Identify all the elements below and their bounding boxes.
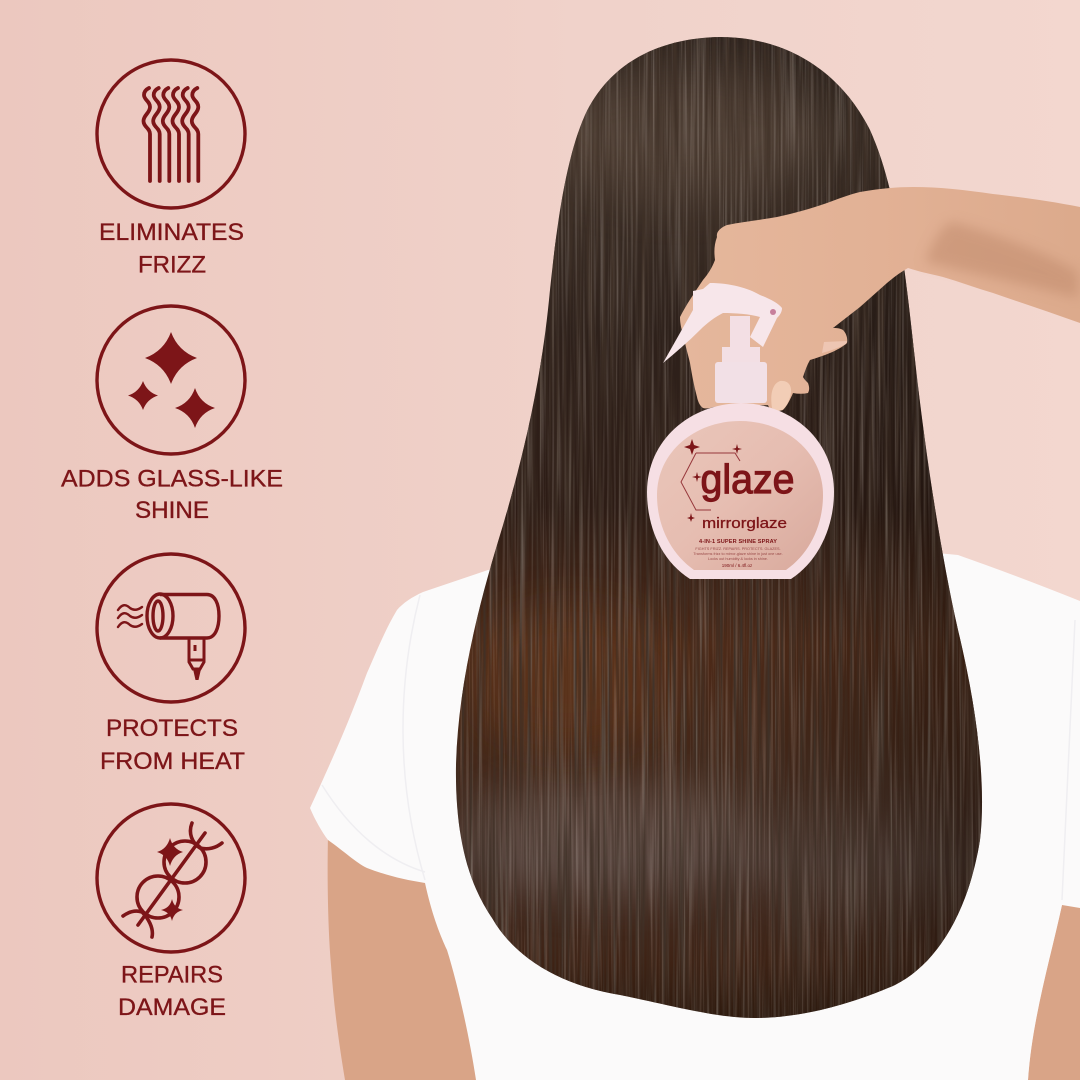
icon: repaired hair strand [97,804,245,952]
label: protects from heat [100,715,245,775]
ring fingernail [822,341,847,353]
label sparkles [684,439,742,522]
label: protects from heat: PROTECTS [106,715,238,742]
volume: 190ml / 6.4fl.oz [722,563,753,568]
trigger pivot dot [770,309,776,315]
wrist shadow [925,222,1078,298]
thumbnail [771,381,791,411]
benefit: adds glass-like shine [61,306,283,524]
icon: frizz strands [97,60,245,208]
label: adds glass-like shine [61,466,283,524]
spray trigger [663,283,782,363]
icon: hair dryer [97,554,245,702]
long brown hair [440,30,1000,1025]
left arm [328,835,520,1080]
mirrorglaze wordmark: mirrorglaze [702,516,787,532]
right arm [1028,895,1080,1080]
label: protects from heat: FROM HEAT [100,748,245,775]
label: adds glass-like shine: ADDS GLASS-LIKE [61,466,283,492]
label: repairs damage: REPAIRS [121,962,223,988]
bottle label [657,421,823,570]
small print line 3: Locks out humidity & locks in shine. [708,557,768,561]
label: repairs damage [118,962,226,1021]
label: repairs damage: DAMAGE [118,994,226,1021]
benefit: protects from heat [97,554,245,775]
label: eliminates frizz: FRIZZ [138,252,206,278]
sleeve fold shadows [322,595,1075,900]
product descriptor: 4-IN-1 SUPER SHINE SPRAY [699,539,777,545]
label: adds glass-like shine: SHINE [135,497,209,524]
benefit: eliminates frizz [97,60,245,278]
white t-shirt [310,530,1080,1080]
icon: sparkles [97,306,245,454]
model photo [310,30,1080,1080]
small print: FIGHTS FRIZZ. REPAIRS. PROTECTS. GLAZES. [695,547,781,551]
bottle cap [715,362,767,403]
hexagon line decoration [681,453,740,510]
pump neck [722,316,760,362]
forearm and hand [680,187,1080,411]
small print line 2: Transforms frizz to mirror-glaze shine in just one use. [693,552,783,556]
label: eliminates frizz [99,219,244,278]
product: mirrorglaze bottle [647,283,834,579]
benefit: repairs damage [97,804,245,1021]
glaze logo: glaze [700,457,794,503]
label: eliminates frizz: ELIMINATES [99,219,244,246]
bottle body [647,403,834,579]
